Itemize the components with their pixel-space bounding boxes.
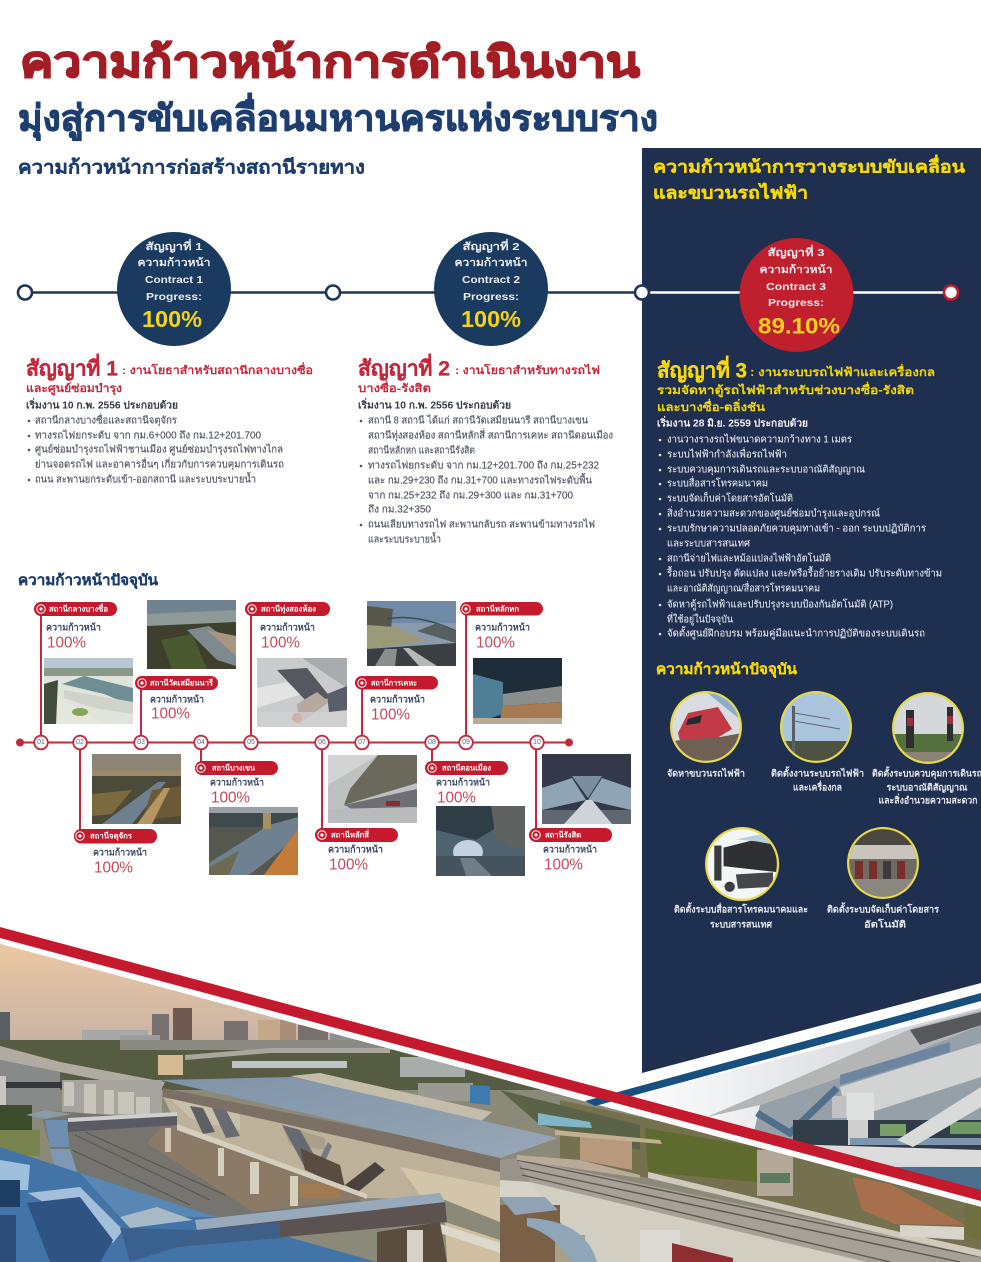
badge: contract 3 progress: Contract 3: [766, 281, 826, 293]
text block: contract 3: รื้อถอน ปรับปรุง ดัดแปลง และ/หรือรื้อย้ายรางเดิม ปรับระดับทางข้าม: [666, 566, 942, 580]
station 09: Don Mueang label: 100%: [437, 790, 476, 806]
blue tint overlay: [0, 1147, 377, 1262]
text block: contract 3: จัดตั้งศูนย์ฝึกอบรม พร้อมคู่มือแนะนำการปฏิบัติของระบบเดินรถ: [667, 626, 925, 640]
decorative line: blue stripe: [585, 993, 981, 1106]
text block: contract 2: และระบบระบายน้ำ: [368, 532, 441, 546]
station 03: Thung Song Hong label: 100%: [261, 634, 300, 652]
station 05: Lak Hok label: 100%: [476, 634, 515, 652]
photo: Rangsit roof: [542, 754, 631, 824]
badge: contract 1 progress: [117, 232, 231, 346]
station 04: Kan Kheha label: สถานีการเคหะ: [371, 678, 417, 688]
text block: contract 3: และระบบสารสนเทศ: [667, 538, 751, 550]
station timeline: numbered nodes: 01: [37, 739, 45, 746]
station 04: Kan Kheha label: ความก้าวหน้า: [370, 694, 425, 706]
station 02: Wat Samian Nari label: ความก้าวหน้า: [150, 694, 204, 706]
title: red headline: ความก้าวหน้าการดำเนินงาน: [20, 38, 640, 86]
station 02: Wat Samian Nari label: 100%: [151, 706, 190, 722]
station 06: Chatuchak label: [74, 829, 157, 876]
walkway: [68, 1115, 177, 1132]
text block: contract 3: สิ่งอำนวยความสะดวกของศูนย์ซ่อมบำรุงและอุปกรณ์: [667, 506, 880, 520]
heading: current progress (stations): ความก้าวหน้าปัจจุบัน: [18, 572, 158, 589]
heading: drive system and rolling stock: [653, 154, 965, 202]
caption: telecom and information: ระบบสารสนเทศ: [710, 920, 773, 930]
photo: Thung Song Hong interior: [257, 658, 347, 727]
badge: contract 1 progress: ความก้าวหน้า: [138, 256, 211, 269]
text block: contract 1: สถานีกลางบางซื่อและสถานีจตุจักร: [35, 412, 178, 426]
bottom photo: elevated station on the right: [674, 1008, 981, 1190]
station mid level: [163, 1097, 500, 1222]
station 07: Bang Khen label: 100%: [211, 790, 250, 806]
caption: telecom and information: ติดตั้งระบบสื่อสารโทรคมนาคมและ: [674, 902, 808, 916]
badge: contract 2 progress: Contract 2: [462, 274, 520, 286]
photo: grand station dusk aerial: [147, 600, 236, 669]
text block: contract 1: ทางรถไฟยกระดับ จาก กม.6+000 ถึง กม.12+201.700: [35, 430, 261, 442]
station 07: Bang Khen label: ความก้าวหน้า: [210, 776, 264, 788]
station 02: Wat Samian Nari label: สถานีวัดเสมียนนารี: [150, 678, 214, 688]
text block: contract 3: สัญญาที่ 3: [657, 354, 747, 384]
station timeline: numbered nodes: 03: [137, 739, 145, 746]
text block: contract 2: และ กม.29+230 ถึง กม.31+700 และทางรถไฟระดับพื้น: [368, 472, 592, 486]
station 03: Thung Song Hong label: ความก้าวหน้า: [260, 622, 315, 634]
caption: fare collection: [827, 902, 940, 930]
station timeline: numbered nodes: 08: [428, 739, 436, 746]
caption: telecom and information: [674, 902, 808, 930]
station timeline: numbered nodes: 02: [76, 739, 84, 746]
station 01: Krung Thep Aphiwat label: 100%: [47, 634, 86, 652]
text block: contract 2: ถนนเลียบทางรถไฟ สะพานกลับรถ สะพานข้ามทางรถไฟ: [368, 518, 595, 530]
station 04: Kan Kheha label: [355, 676, 438, 724]
text block: contract 2: ทางรถไฟยกระดับ จาก กม.12+201.700 ถึง กม.25+232: [368, 460, 599, 472]
text block: contract 3: [657, 354, 942, 640]
lower beige wall: [445, 1222, 500, 1262]
station 06: Chatuchak label: สถานีจตุจักร: [90, 830, 133, 842]
station 10: Rangsit label: สถานีรังสิต: [545, 830, 581, 840]
station 06: Chatuchak label: 100%: [94, 860, 133, 876]
station 05: Lak Hok label: [460, 602, 543, 652]
text block: contract 2: สถานีทุ่งสองห้อง สถานีหลักสี่ สถานีการเคหะ สถานีดอนเมือง: [368, 428, 613, 442]
text block: contract 2: สถานี 8 สถานี ได้แก่ สถานีวัดเสมียนนารี สถานีบางเขน: [368, 414, 588, 426]
photo: Bang Khen aerial: [209, 807, 298, 875]
station 10: Rangsit label: [529, 828, 612, 874]
text block: contract 3: และบางซื่อ-ตลิ่งชัน: [657, 398, 765, 414]
icon: telecom radios: [705, 827, 779, 901]
badge: contract 2 progress: สัญญาที่ 2: [462, 238, 520, 253]
station timeline: numbered nodes: 04: [197, 739, 205, 746]
heading: current progress (systems): ความก้าวหน้าปัจจุบัน: [656, 661, 797, 678]
badge: contract 3 progress: [740, 238, 854, 352]
text block: contract 3: งานวางรางรถไฟขนาดความกว้างทาง 1 เมตร: [667, 434, 853, 446]
bottom photo: Bang Sue grand station: [0, 940, 981, 1262]
photo: Don Mueang roof: [436, 806, 525, 876]
badge: contract 1 progress: 100%: [142, 306, 202, 332]
station 08: Lak Si label: [315, 828, 398, 874]
icon: rolling stock train: [670, 691, 742, 763]
station window band: [163, 1088, 500, 1172]
badge: contract 1 progress: Contract 1: [145, 274, 203, 286]
station 03: Thung Song Hong label: สถานีทุ่งสองห้อง: [261, 604, 316, 614]
lower deck: [812, 1144, 981, 1167]
station 10: Rangsit label: 100%: [544, 856, 583, 874]
badge: contract 2 progress: 100%: [461, 306, 521, 332]
station 05: Lak Hok label: สถานีหลักหก: [476, 604, 519, 614]
text block: contract 2: จาก กม.25+232 ถึง กม.29+300 และ กม.31+700: [368, 490, 573, 502]
text block: contract 3: ระบบรักษาความปลอดภัยควบคุมทางเข้า - ออก ระบบปฏิบัติการ: [667, 522, 927, 534]
right background: trees and houses: [560, 1100, 981, 1250]
badge: contract 2 progress: Progress:: [463, 291, 519, 303]
lower tracks and walls: [500, 1158, 530, 1182]
station 01: Krung Thep Aphiwat label: ความก้าวหน้า: [46, 622, 101, 634]
panel: navy drive system panel: [642, 148, 981, 1073]
badge: contract 2 progress: [434, 232, 548, 346]
photo: Lak Hok night view: [473, 658, 562, 724]
station 08: Lak Si label: สถานีหลักสี่: [331, 828, 369, 840]
station timeline: numbered nodes: [34, 736, 544, 749]
text block: contract 3: ระบบควบคุมการเดินรถและระบบอาณัติสัญญาณ: [667, 464, 865, 476]
text block: contract 2: สถานีหลักหก และสถานีรังสิต: [368, 444, 475, 456]
station timeline: numbered nodes: 09: [462, 739, 470, 746]
photo: platform canopy: [367, 601, 456, 666]
text block: contract 1: : งานโยธาสำหรับสถานีกลางบางซื่อ: [122, 362, 313, 377]
text block: contract 3: รวมจัดหาตู้รถไฟฟ้าสำหรับช่วงบางซื่อ-รังสิต: [657, 381, 914, 398]
text block: contract 3: ระบบจัดเก็บค่าโดยสารอัตโนมัติ: [667, 490, 793, 504]
station 06: Chatuchak label: ความก้าวหน้า: [93, 846, 147, 858]
caption: electrical and mechanical: และเครื่องกล: [793, 780, 842, 794]
text block: contract 3: : งานระบบรถไฟฟ้าและเครื่องกล: [750, 363, 935, 379]
text block: contract 2: สัญญาที่ 2: [358, 352, 450, 382]
caption: electrical and mechanical: ติดตั้งงานระบบรถไฟฟ้า: [771, 766, 864, 780]
caption: fare collection: อัตโนมัติ: [864, 918, 906, 930]
badge: contract 1 progress: Progress:: [146, 291, 202, 303]
badge: contract 3 progress: สัญญาที่ 3: [768, 244, 825, 259]
station 04: Kan Kheha label: 100%: [371, 706, 410, 724]
text block: contract 1: สัญญาที่ 1: [26, 352, 118, 382]
heading: drive system and rolling stock: ความก้าวหน้าการวางระบบขับเคลื่อน: [653, 154, 965, 176]
heading: drive system and rolling stock: และขบวนรถไฟฟ้า: [653, 182, 808, 202]
station 10: Rangsit label: ความก้าวหน้า: [543, 844, 597, 856]
text block: contract 1: ย่านจอดรถไฟ และอาคารอื่นๆ เกี่ยวกับการควบคุมการเดินรถ: [35, 456, 284, 470]
station timeline: numbered nodes: 07: [358, 739, 366, 746]
station 01: Krung Thep Aphiwat label: สถานีกลางบางซื่อ: [49, 602, 108, 614]
photo: grand station aerial: [44, 658, 133, 724]
text block: contract 2: เริ่มงาน 10 ก.พ. 2556 ประกอบด้วย: [358, 398, 511, 412]
text block: contract 3: ระบบไฟฟ้ากำลังเพื่อรถไฟฟ้า: [667, 446, 787, 460]
station under-deck: [147, 1125, 367, 1212]
station 01: Krung Thep Aphiwat label: [34, 602, 117, 652]
footbridge: [177, 1202, 447, 1247]
badge: contract 3 progress: ความก้าวหน้า: [760, 263, 833, 276]
text block: contract 2: : งานโยธาสำหรับทางรถไฟ: [455, 363, 600, 377]
text block: contract 3: ที่ใช้อยู่ในปัจจุบัน: [667, 612, 733, 626]
icon: ticket gates: [847, 827, 919, 899]
text block: contract 3: สถานีจ่ายไฟและหม้อแปลงไฟฟ้าอัตโนมัติ: [667, 552, 831, 564]
decorative line: red stripe: [0, 927, 981, 1201]
station timeline: numbered nodes: 06: [318, 739, 326, 746]
text block: contract 1: ถนน สะพานยกระดับเข้า-ออกสถานี และระบบระบายน้ำ: [35, 472, 256, 486]
station 08: Lak Si label: ความก้าวหน้า: [328, 844, 383, 856]
text block: contract 3: เริ่มงาน 28 มิ.ย. 2559 ประกอบด้วย: [657, 416, 808, 430]
text block: contract 2: บางซื่อ-รังสิต: [358, 380, 431, 395]
station timeline: connecting lines: [17, 610, 572, 835]
station timeline: numbered nodes: 05: [247, 739, 255, 746]
text block: contract 1: และศูนย์ซ่อมบำรุง: [26, 382, 122, 396]
text block: contract 1: [26, 352, 313, 486]
caption: train control and signalling: ระบบอาณัติสัญญาณ: [886, 782, 968, 794]
station 03: Thung Song Hong label: [245, 602, 330, 652]
stairs: [757, 1088, 837, 1133]
station roof: [160, 1077, 558, 1158]
station 08: Lak Si label: 100%: [329, 856, 368, 874]
text block: contract 2: ถึง กม.32+350: [368, 504, 431, 516]
badge: contract 1 progress: สัญญาที่ 1: [146, 238, 203, 253]
station back roof: [290, 1073, 492, 1122]
text block: contract 1: เริ่มงาน 10 ก.พ. 2556 ประกอบด้วย: [26, 398, 178, 412]
station 09: Don Mueang label: สถานีดอนเมือง: [442, 762, 491, 772]
text block: contract 2: [358, 352, 613, 546]
station timeline: numbered nodes: 10: [533, 739, 541, 746]
station 02: Wat Samian Nari label: [135, 676, 218, 722]
text block: contract 3: จัดหาตู้รถไฟฟ้าและปรับปรุงระบบป้องกันอัตโนมัติ (ATP): [667, 598, 893, 610]
station 07: Bang Khen label: สถานีบางเขน: [212, 762, 255, 772]
title: navy headline: มุ่งสู่การขับเคลื่อนมหานครแห่งระบบราง: [18, 92, 658, 142]
under deck: [793, 1120, 981, 1150]
viaduct: [0, 1046, 165, 1092]
caption: electrical and mechanical: [771, 766, 864, 794]
photo: Chatuchak aerial dusk: [92, 754, 181, 824]
caption: train control and signalling: [872, 766, 981, 806]
photo: Lak Si platform: [328, 755, 417, 823]
timeline: contract progress line: [18, 286, 958, 300]
station 07: Bang Khen label: [195, 761, 278, 806]
text block: contract 1: ศูนย์ซ่อมบำรุงรถไฟฟ้าชานเมือง ศูนย์ซ่อมบำรุงรถไฟทางไกล: [35, 444, 283, 456]
skyline: [0, 1008, 364, 1042]
badge: contract 2 progress: ความก้าวหน้า: [454, 256, 528, 269]
station 09: Don Mueang label: ความก้าวหน้า: [436, 776, 490, 788]
badge: contract 3 progress: 89.10%: [758, 314, 840, 338]
text block: contract 3: ระบบสื่อสารโทรคมนาคม: [667, 476, 768, 490]
icon: signalling system: [892, 692, 964, 764]
heading: station construction progress: ความก้าวหน้าการก่อสร้างสถานีรายทาง: [18, 156, 365, 178]
caption: rolling stock: จัดหาขบวนรถไฟฟ้า: [667, 768, 745, 780]
diagonal strut: [897, 1087, 981, 1147]
icon: electrification mast: [780, 691, 852, 763]
text block: contract 3: และอาณัติสัญญาณ/สื่อสารโทรคมนาคม: [667, 580, 820, 594]
station 09: Don Mueang label: [425, 761, 508, 806]
left greenery and yard: [0, 1105, 32, 1130]
caption: fare collection: ติดตั้งระบบจัดเก็บค่าโดยสาร: [827, 902, 940, 916]
badge: contract 3 progress: Progress:: [768, 297, 824, 309]
station 05: Lak Hok label: ความก้าวหน้า: [475, 622, 530, 634]
